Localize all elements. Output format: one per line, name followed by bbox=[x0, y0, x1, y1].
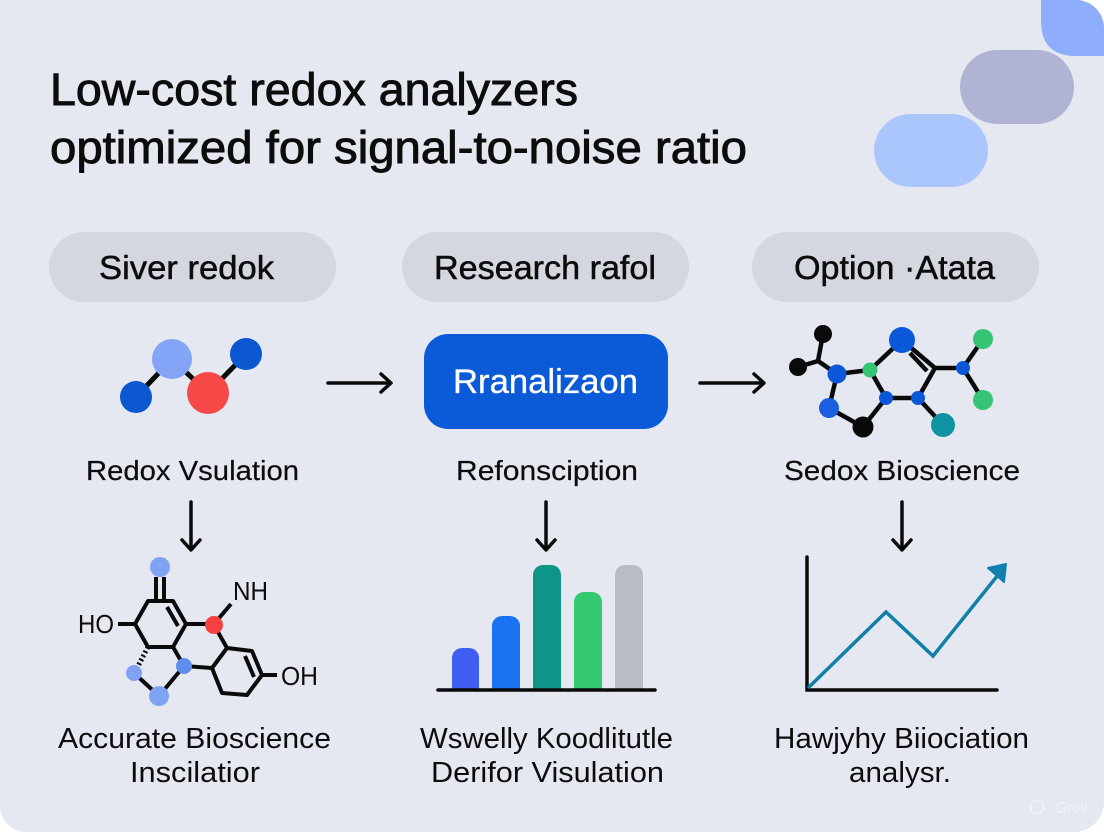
pill: Research rafol bbox=[402, 232, 689, 302]
caption: Hawjyhy Biiociation analysr.: Hawjyhy Biiociation bbox=[774, 723, 1029, 755]
caption: Wswelly Koodlitutle Derifor Visulation: Wswelly Koodlitutle bbox=[420, 723, 673, 755]
arrow: down 1 bbox=[182, 502, 200, 550]
blue box: Rranalizaon bbox=[424, 334, 668, 429]
arrow: molecule to analyzer bbox=[328, 374, 391, 392]
label: Redox Vsulation: Redox Vsulation bbox=[86, 455, 299, 486]
pill: Option Atata bbox=[752, 232, 1039, 302]
caption: Hawjyhy Biiociation analysr.: analysr. bbox=[849, 757, 951, 789]
icon: chemical structure: OH bbox=[281, 661, 318, 691]
icon: chemical structure bbox=[78, 557, 318, 706]
blue box: Rranalizaon: Rranalizaon bbox=[453, 363, 638, 401]
bar chart bbox=[438, 565, 655, 690]
pill: Siver redok bbox=[49, 232, 336, 302]
title: Low-cost redox analyzers bbox=[50, 64, 578, 115]
pill: Option Atata: Option ·Atata bbox=[794, 249, 996, 286]
caption: Wswelly Koodlitutle Derifor Visulation: Derifor Visulation bbox=[431, 757, 664, 789]
decorative rounded shapes bbox=[874, 0, 1104, 187]
caption: Accurate Bioscience Inscilatior bbox=[58, 723, 331, 789]
icon: simple molecule bbox=[120, 338, 262, 414]
pill: Siver redok: Siver redok bbox=[99, 249, 275, 286]
title bbox=[50, 64, 747, 173]
title: optimized for signal-to-noise ratio bbox=[50, 122, 747, 173]
watermark: Grok bbox=[1030, 800, 1089, 817]
arrow: down 3 bbox=[893, 502, 911, 550]
arrow: down 2 bbox=[537, 502, 555, 550]
label: Refonsciption: Refonsciption bbox=[456, 455, 638, 486]
caption: Wswelly Koodlitutle Derifor Visulation bbox=[420, 723, 673, 789]
watermark: Grok: Grok bbox=[1056, 800, 1089, 817]
caption: Accurate Bioscience Inscilatior: Inscilatior bbox=[130, 757, 260, 789]
pill: Research rafol: Research rafol bbox=[434, 249, 656, 286]
caption: Accurate Bioscience Inscilatior: Accurate Bioscience bbox=[58, 723, 331, 755]
arrow: analyzer to network molecule bbox=[700, 374, 764, 392]
icon: network molecule bbox=[789, 325, 993, 438]
icon: chemical structure: HO bbox=[78, 609, 114, 639]
icon: chemical structure: NH bbox=[233, 576, 268, 606]
label: Sedox Bioscience: Sedox Bioscience bbox=[784, 455, 1020, 486]
caption: Hawjyhy Biiociation analysr. bbox=[774, 723, 1029, 789]
line chart bbox=[807, 557, 1006, 690]
